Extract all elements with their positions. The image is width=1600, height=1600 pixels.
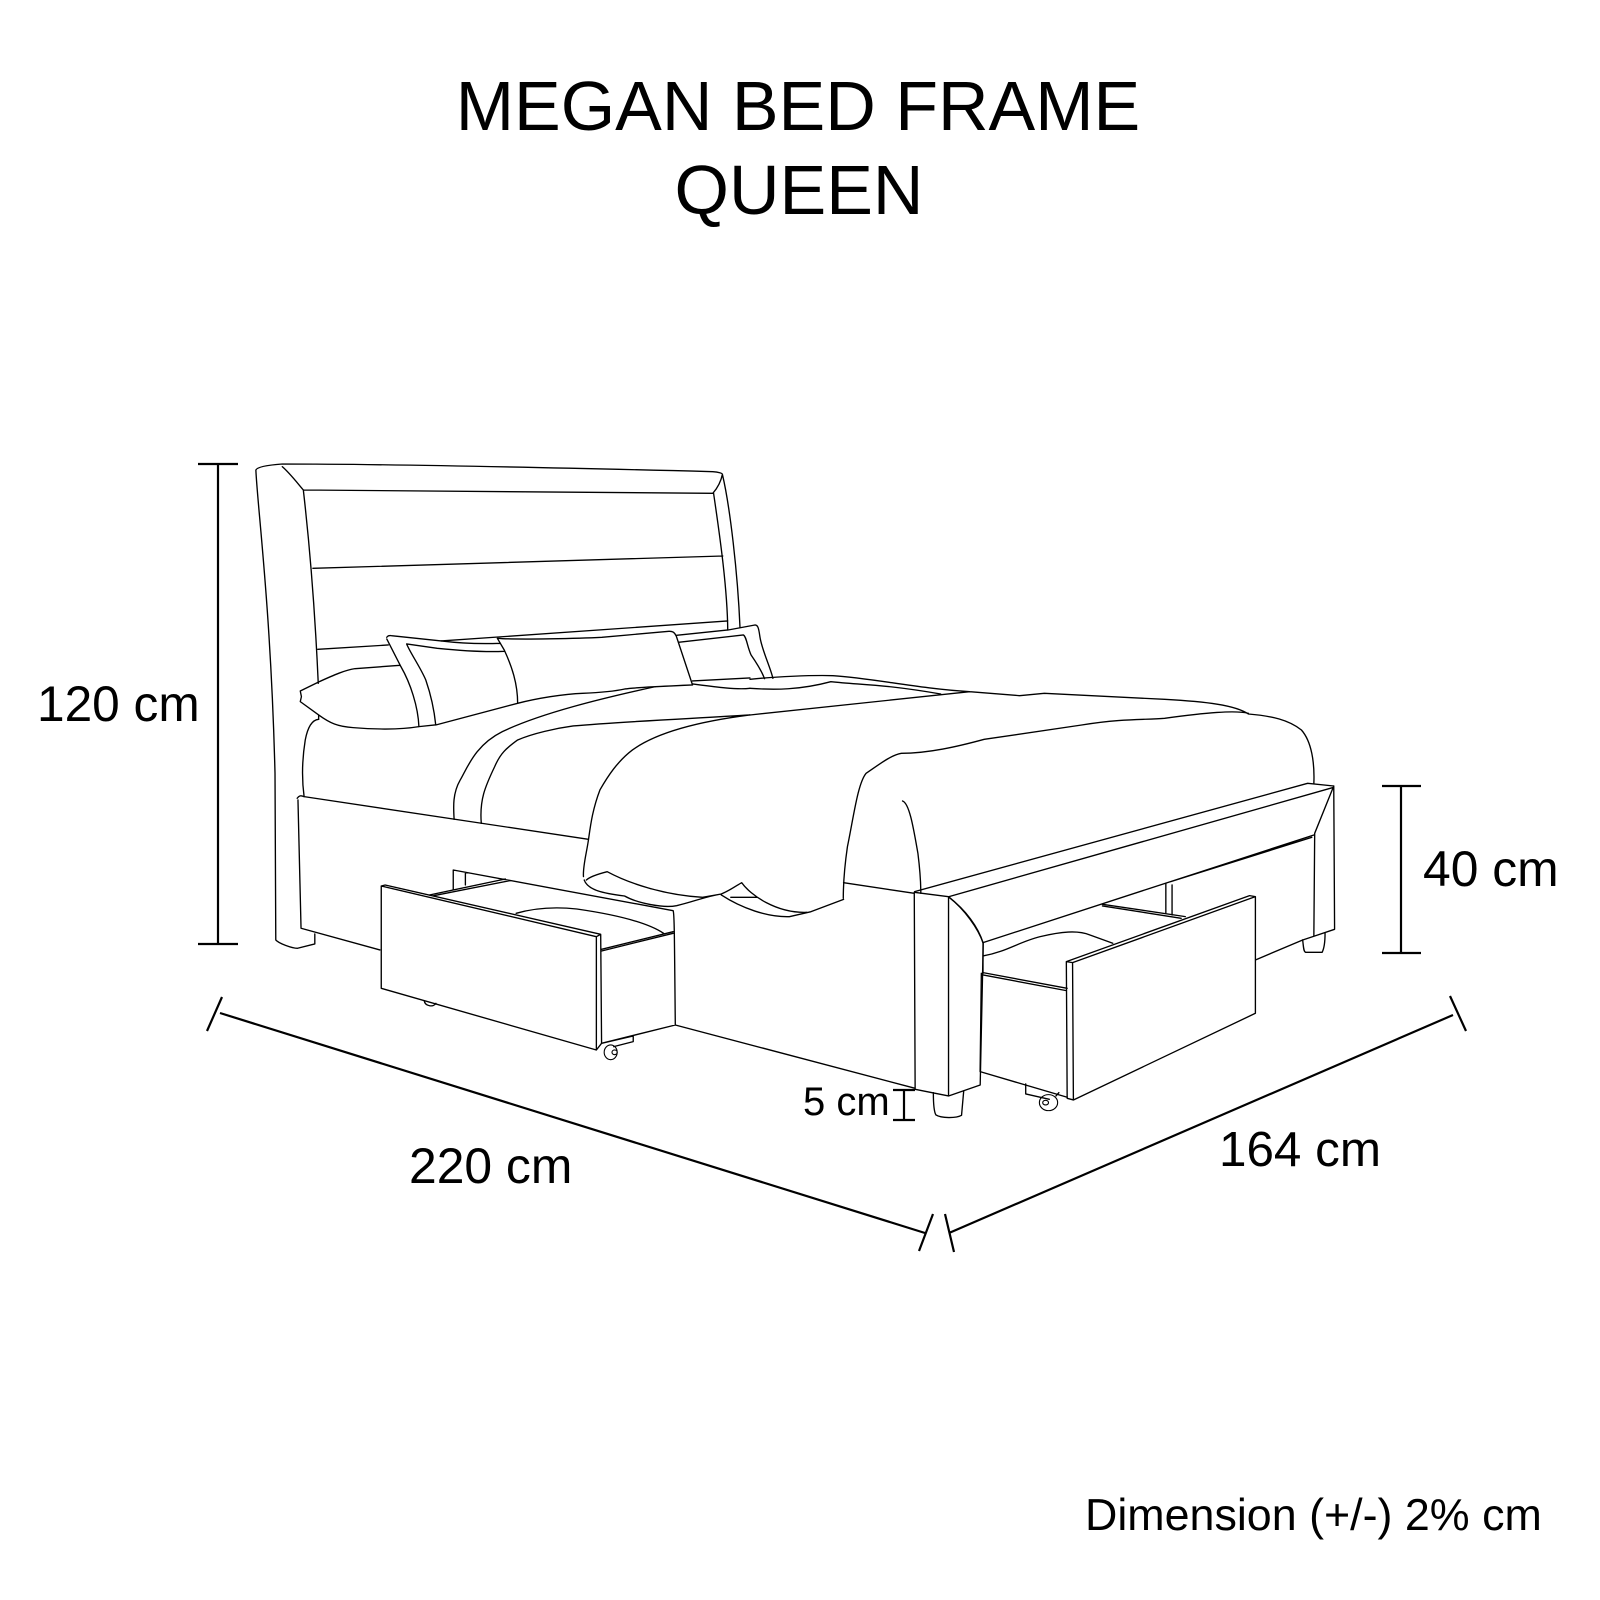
- mattress and duvet left: [303, 678, 750, 877]
- duvet right: [750, 676, 1314, 898]
- title: MEGAN BED FRAME: [456, 67, 1140, 145]
- label: 220 cm: 220 cm: [409, 1138, 572, 1194]
- front leg: [933, 1091, 964, 1118]
- caster: [604, 1045, 617, 1060]
- headboard: [256, 464, 740, 948]
- label: 40 cm: 40 cm: [1423, 841, 1559, 897]
- label: 120 cm: 120 cm: [37, 676, 200, 732]
- dimension: leg height 5 cm: [893, 1090, 915, 1120]
- title: [456, 67, 1140, 229]
- dimension: length 220 cm: [207, 997, 933, 1251]
- rear leg: [1303, 933, 1325, 952]
- right caster: [1026, 1084, 1059, 1099]
- base rail and corner post: [675, 883, 983, 1096]
- label: 5 cm: 5 cm: [803, 1080, 890, 1124]
- drawer opening: [424, 870, 675, 1047]
- footnote: Dimension (+/-) 2% cm: [1085, 1490, 1542, 1540]
- dimension: base height 40 cm: [1382, 786, 1421, 953]
- footboard: [915, 783, 1335, 943]
- side rail: [297, 796, 588, 950]
- title: QUEEN: [675, 151, 923, 229]
- bed illustration: [256, 464, 1335, 1118]
- label: 164 cm: 164 cm: [1219, 1122, 1381, 1177]
- right drawer opening: [980, 883, 1185, 1097]
- bed foot and right drawer: [750, 676, 1335, 1111]
- pillows: [300, 625, 773, 729]
- drawer front: [381, 885, 602, 1050]
- headboard and pillows: [256, 464, 773, 950]
- duvet hem: [584, 872, 844, 917]
- dimension: width 164 cm: [945, 996, 1466, 1252]
- right drawer front: [1066, 896, 1303, 1100]
- dimension: height 120 cm: [198, 464, 238, 944]
- left drawer and side rail: [381, 870, 983, 1118]
